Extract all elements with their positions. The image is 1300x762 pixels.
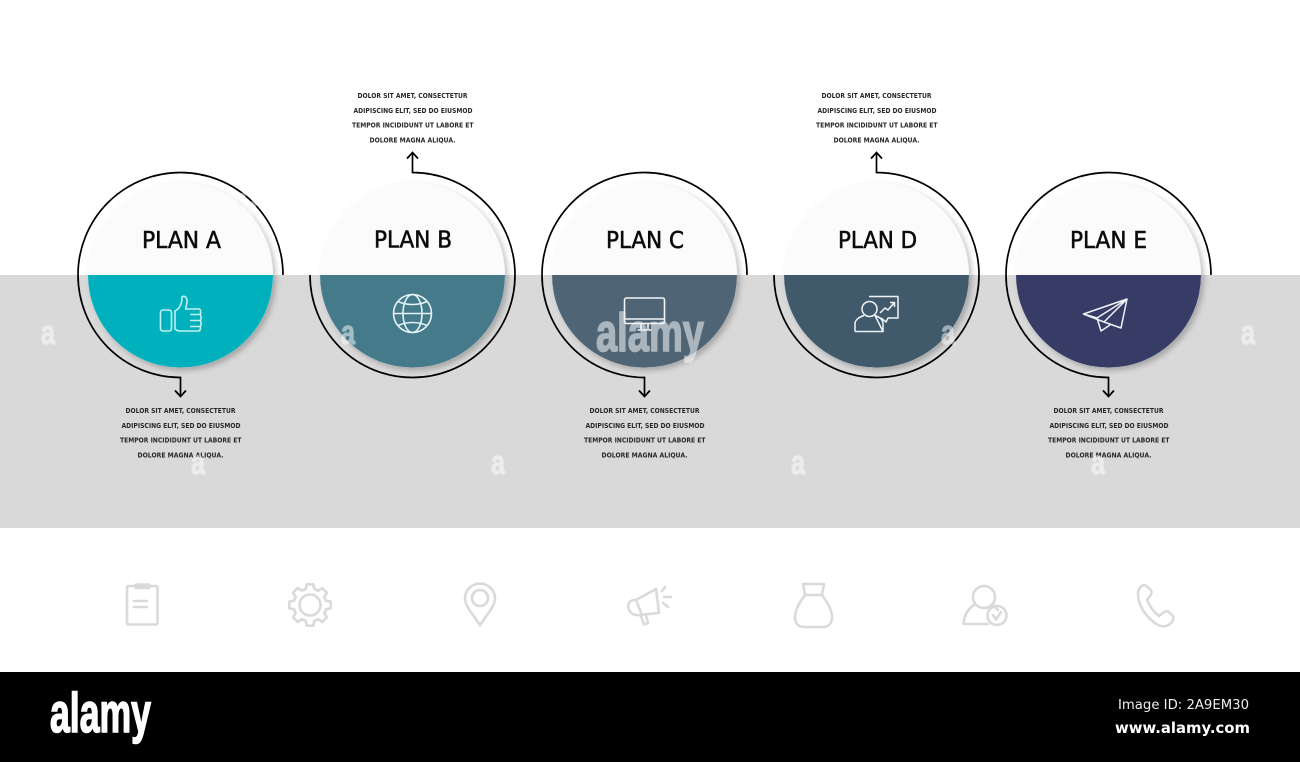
icon: user with check [964, 586, 1006, 625]
watermark: repeated letter a: a [341, 314, 356, 352]
Plan E outline arrow [1006, 172, 1211, 396]
panel: Plan E [1006, 172, 1211, 460]
icon: clipboard [127, 584, 158, 624]
Plan C description: ADIPISCING ELIT, SED DO EIUSMOD [586, 421, 705, 430]
Plan D description: ADIPISCING ELIT, SED DO EIUSMOD [818, 106, 937, 115]
watermark: alamy: alamy [596, 303, 704, 363]
watermark: repeated letter a: a [1091, 444, 1106, 482]
Plan E description: ADIPISCING ELIT, SED DO EIUSMOD [1050, 421, 1169, 430]
Plan E heading: PLAN E [1070, 228, 1147, 254]
icon: monitor [624, 298, 664, 330]
watermark: faint alamy on Plan E: alamy [1048, 176, 1156, 228]
Plan B disc [320, 182, 505, 368]
Plan D description: DOLOR SIT AMET, CONSECTETUR [822, 91, 932, 100]
Plan C outline arrow [542, 172, 747, 396]
Plan D description: TEMPOR INCIDIDUNT UT LABORE ET [816, 120, 938, 130]
watermark: repeated letter a: a [491, 444, 506, 482]
footer logo: alamy [50, 681, 151, 744]
Plan D heading: PLAN D [838, 228, 917, 254]
watermark: repeated letter a: a [1241, 314, 1256, 352]
Plan C description: DOLOR SIT AMET, CONSECTETUR [590, 406, 700, 415]
Plan B outline arrow [310, 152, 515, 378]
icon: globe [394, 294, 432, 332]
Plan C heading: PLAN C [606, 228, 684, 254]
Plan A outline arrow [78, 172, 283, 396]
icon: money bag [795, 584, 832, 627]
panel: Plan B [310, 91, 515, 378]
Plan B heading: PLAN B [374, 228, 452, 254]
Plan A description: TEMPOR INCIDIDUNT UT LABORE ET [120, 436, 242, 444]
Plan E description [1048, 406, 1170, 460]
Plan A heading: PLAN A [142, 228, 221, 254]
Plan B description: DOLORE MAGNA ALIQUA. [370, 136, 456, 144]
Plan E description: DOLOR SIT AMET, CONSECTETUR [1054, 406, 1164, 415]
watermark: repeated letter a: a [191, 444, 206, 482]
Plan B description [352, 91, 474, 144]
Plan D description: DOLORE MAGNA ALIQUA. [834, 136, 920, 144]
watermark: repeated letter a: a [41, 314, 56, 352]
Plan E description: DOLORE MAGNA ALIQUA. [1066, 450, 1152, 460]
Plan D disc [784, 182, 969, 368]
Plan C description: TEMPOR INCIDIDUNT UT LABORE ET [584, 436, 706, 444]
footer bar [0, 672, 1300, 762]
Plan D description [816, 91, 938, 144]
watermark: faint alamy on Plan A: alamy [152, 176, 260, 228]
footer image id: Image ID: 2A9EM30 [1118, 697, 1249, 713]
icon: phone [1138, 585, 1173, 626]
Plan C description: DOLORE MAGNA ALIQUA. [602, 450, 688, 460]
background grey band [0, 275, 1300, 528]
icon: megaphone [628, 587, 671, 624]
Plan C description [584, 406, 706, 460]
icon: thumbs up [160, 296, 201, 331]
Plan C disc [552, 182, 737, 368]
watermark: repeated letter a: a [941, 314, 956, 352]
Plan A description: DOLOR SIT AMET, CONSECTETUR [126, 406, 236, 415]
Plan A description [120, 406, 242, 460]
panel: Plan D [774, 91, 979, 378]
watermark: repeated letter a [41, 314, 1256, 482]
icon: location pin [465, 584, 495, 626]
Plan E description: TEMPOR INCIDIDUNT UT LABORE ET [1048, 436, 1170, 444]
Plan A disc [88, 182, 273, 368]
icon: paper plane [1084, 299, 1127, 331]
icon row: grey line icons [127, 584, 1173, 627]
icon: gear [289, 584, 331, 626]
Plan B description: TEMPOR INCIDIDUNT UT LABORE ET [352, 120, 474, 130]
Plan D outline arrow [774, 152, 979, 378]
Plan B description: ADIPISCING ELIT, SED DO EIUSMOD [354, 106, 473, 115]
watermark: repeated letter a: a [791, 444, 806, 482]
Plan A description: DOLORE MAGNA ALIQUA. [138, 450, 224, 460]
Plan B description: DOLOR SIT AMET, CONSECTETUR [358, 91, 468, 100]
Plan E disc [1016, 182, 1201, 368]
footer url: www.alamy.com [1115, 719, 1250, 737]
panel: Plan A [78, 172, 283, 460]
Plan A description: ADIPISCING ELIT, SED DO EIUSMOD [122, 421, 241, 430]
panel: Plan C [542, 172, 747, 460]
icon: presenter with chart [855, 296, 898, 332]
